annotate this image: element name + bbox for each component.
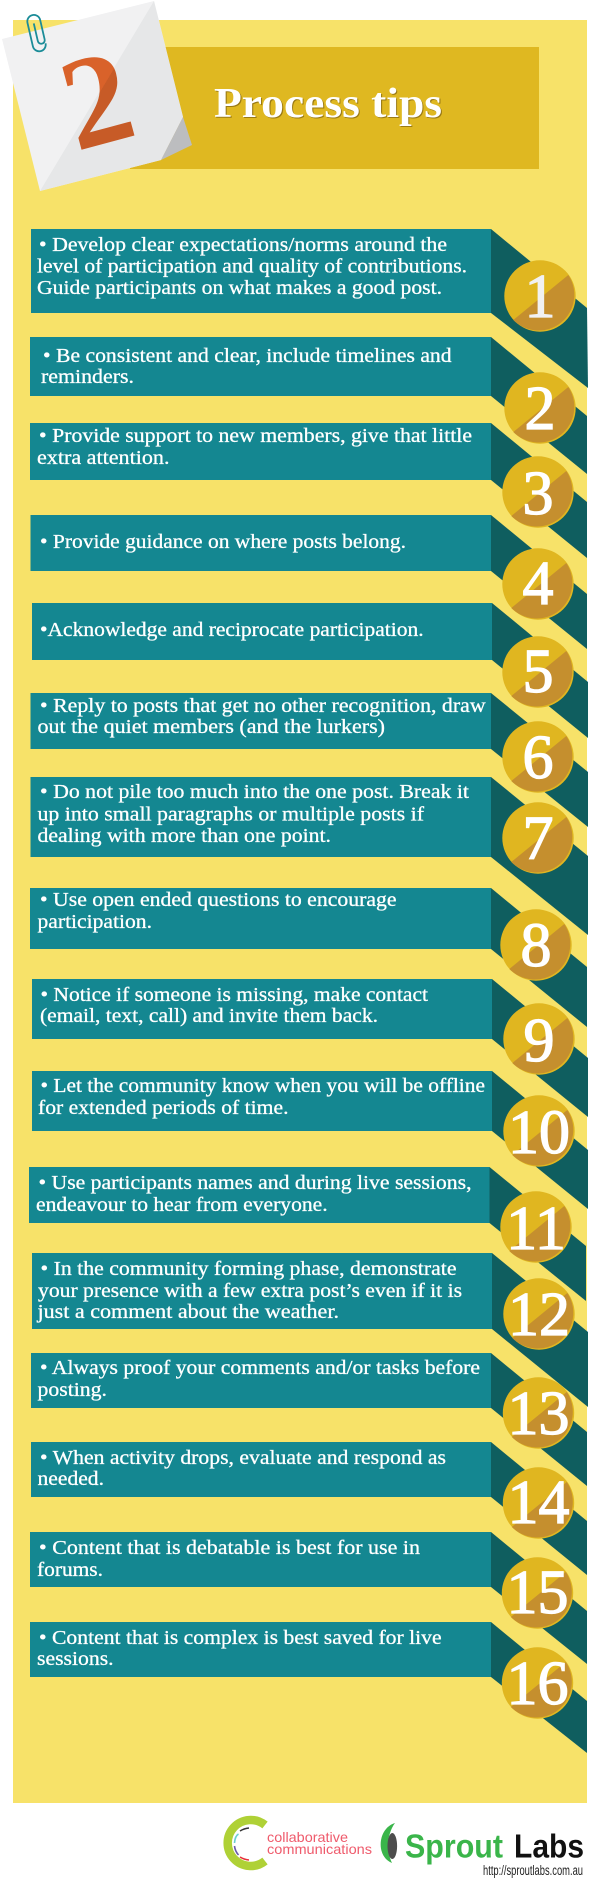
tip 3 xyxy=(30,423,587,558)
tip 2: • Be consistent and clear, include timelines and xyxy=(43,345,452,367)
tip 4 xyxy=(30,515,587,649)
tip 6: • Reply to posts that get no other recognition, draw xyxy=(40,695,486,717)
note paper with big number 2: 2 xyxy=(46,20,147,179)
tip 9: • Notice if someone is missing, make contact xyxy=(40,984,428,1006)
tip 10: • Let the community know when you will be offline xyxy=(40,1075,485,1097)
tip 15: 15 xyxy=(506,1559,568,1627)
tip 4: • Provide guidance on where posts belong. xyxy=(40,531,406,553)
logo: collaborative communications: communications xyxy=(267,1841,372,1857)
tip 10 xyxy=(32,1071,588,1209)
tip 13 xyxy=(31,1353,587,1486)
tip 11: • Use participants names and during live sessions, xyxy=(38,1172,472,1194)
tip 4: 4 xyxy=(522,550,554,618)
tip 12: • In the community forming phase, demonstrate xyxy=(40,1258,457,1280)
tip 11: endeavour to hear from everyone. xyxy=(36,1194,328,1216)
tip 15: • Content that is debatable is best for use in xyxy=(39,1537,420,1559)
tip 2: reminders. xyxy=(41,366,134,388)
tip 15: forums. xyxy=(37,1559,103,1581)
tip 5: •Acknowledge and reciprocate participation. xyxy=(40,619,424,641)
tip 9: (email, text, call) and invite them back. xyxy=(40,1005,378,1027)
logo: collaborative communications: collaborative xyxy=(267,1829,348,1845)
tip 15 xyxy=(30,1532,587,1664)
tip 7: up into small paragraphs or multiple posts if xyxy=(38,804,424,826)
tip 12: 12 xyxy=(508,1281,570,1349)
tip 8: • Use open ended questions to encourage xyxy=(40,889,397,911)
tip 16 xyxy=(30,1622,587,1753)
tip 5 xyxy=(32,603,588,738)
tip 1: Guide participants on what makes a good post. xyxy=(37,277,442,299)
tip 10: for extended periods of time. xyxy=(38,1097,288,1119)
tip 10: 10 xyxy=(508,1099,570,1167)
tip 6: out the quiet members (and the lurkers) xyxy=(38,716,385,738)
tip 13: 13 xyxy=(508,1380,570,1448)
tip 11 xyxy=(29,1167,586,1301)
tip 7: 7 xyxy=(522,805,554,873)
tip 8: 8 xyxy=(520,912,552,980)
tip 7: dealing with more than one point. xyxy=(38,825,331,847)
logo: Sprout Labs: Labs xyxy=(514,1828,584,1864)
tip 9: 9 xyxy=(524,1007,554,1075)
tip 9 xyxy=(32,979,588,1117)
tip 6 xyxy=(30,693,588,827)
tip 8 xyxy=(30,888,587,1027)
note paper with big number 2 xyxy=(2,1,192,191)
tip 16: 16 xyxy=(506,1650,568,1718)
tip 7 xyxy=(30,777,588,935)
logo: collaborative communications xyxy=(228,1820,372,1866)
tip 13: • Always proof your comments and/or tasks before xyxy=(40,1357,480,1379)
tip 11: 11 xyxy=(506,1195,566,1263)
tip 14: • When activity drops, evaluate and respond as xyxy=(40,1447,446,1469)
title banner: Process tips xyxy=(214,81,442,127)
tip 1: • Develop clear expectations/norms around the xyxy=(39,234,447,256)
title banner xyxy=(130,47,539,169)
tip 16: sessions. xyxy=(37,1648,114,1670)
icon: paperclip xyxy=(26,14,47,53)
tip 1 xyxy=(31,229,588,388)
tip 12 xyxy=(32,1253,588,1407)
tip 1: 1 xyxy=(524,263,556,331)
tip 14 xyxy=(31,1442,587,1575)
tip 6: 6 xyxy=(522,724,554,792)
logo: Sprout Labs: Sprout xyxy=(405,1828,503,1864)
tip 8: participation. xyxy=(38,911,152,933)
tip 3: 3 xyxy=(522,460,554,528)
tip 7: • Do not pile too much into the one post. Break it xyxy=(40,781,469,803)
tip 14: needed. xyxy=(38,1468,104,1490)
tip 13: posting. xyxy=(38,1379,107,1401)
logo: Sprout Labs xyxy=(381,1823,584,1878)
tip 1: level of participation and quality of contributions. xyxy=(37,256,467,278)
tip 2 xyxy=(30,337,587,474)
tip 5: 5 xyxy=(522,638,554,706)
tip 12: your presence with a few extra post’s even if it is xyxy=(38,1280,462,1302)
tip 3: extra attention. xyxy=(37,447,170,469)
tip 14: 14 xyxy=(508,1469,570,1537)
tip 2: 2 xyxy=(524,375,556,443)
tip 12: just a comment about the weather. xyxy=(36,1301,339,1323)
tip 16: • Content that is complex is best saved for live xyxy=(39,1627,442,1649)
tip 3: • Provide support to new members, give that little xyxy=(39,425,472,447)
